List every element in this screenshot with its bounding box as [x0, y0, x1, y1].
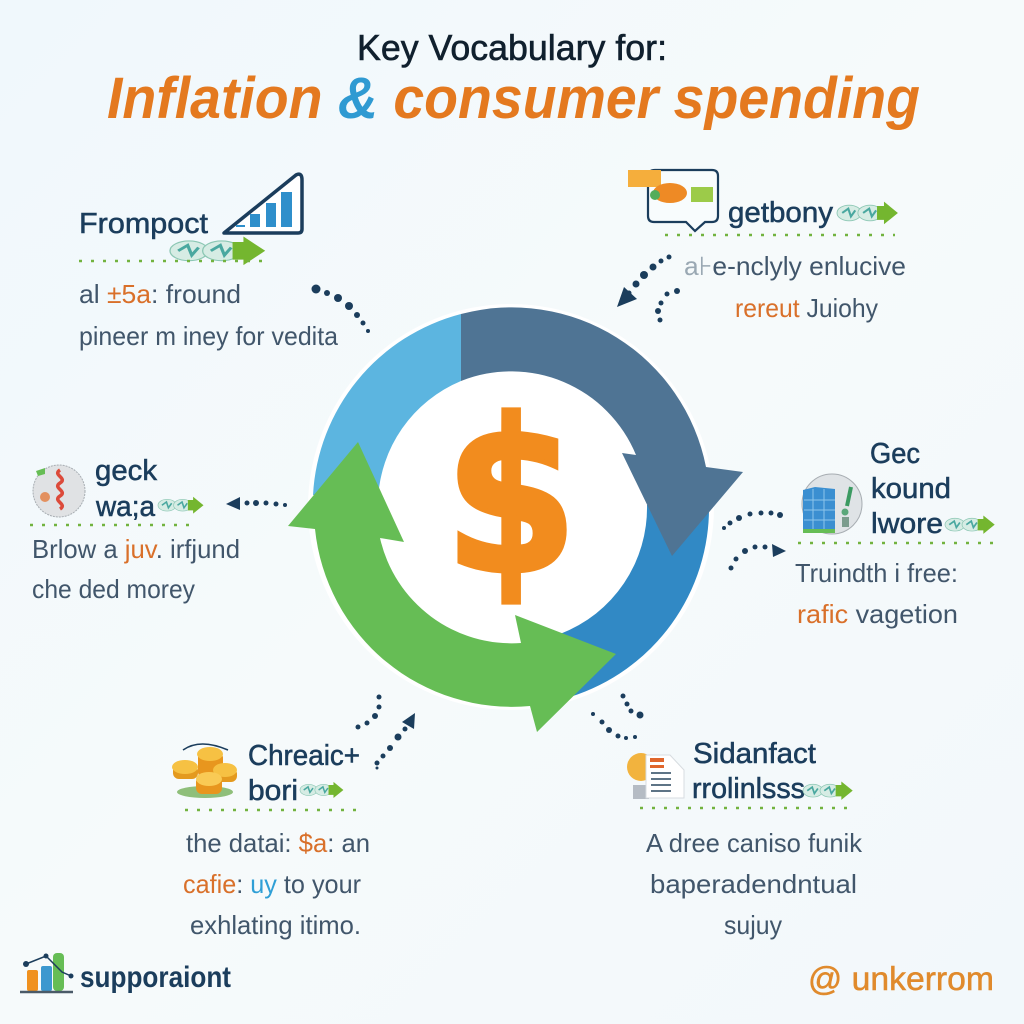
decoration: label pills [945, 515, 995, 534]
footer logo [20, 953, 231, 994]
panel: right term: lwore [871, 508, 943, 540]
panel: left term [30, 455, 240, 604]
decoration: label pills [158, 497, 204, 514]
icon: bar chart triangle [224, 174, 302, 233]
panel: bottom left term: exhlating itimo. [190, 910, 361, 940]
heading: geck [95, 455, 157, 487]
panel: right term [795, 438, 995, 629]
arrow: right dots [722, 510, 786, 570]
panel: bottom right term [627, 738, 863, 940]
definition: al ±5a: fround [79, 279, 241, 309]
panel: left term: che ded morey [32, 574, 195, 604]
icon: gold coins [172, 744, 237, 798]
ring arrow: slate blue [461, 307, 743, 556]
ring segment: light blue [313, 314, 461, 500]
panel: right term: kound [871, 473, 951, 505]
definition: Brlow a juv. irfjund [32, 534, 240, 564]
panel: bottom left term [172, 740, 370, 940]
definition: a⊦e-nclyly enlucive [684, 251, 906, 281]
definition: Truindth i free: [795, 558, 958, 588]
decoration: label pills [300, 782, 343, 798]
panel: bottom right term: baperadendntual [650, 869, 857, 899]
heading: Sidanfact [693, 738, 816, 770]
icon: dollar sign: $ [445, 374, 577, 621]
footer brand: @ unkerrom [808, 960, 994, 997]
panel: top right term: rereut Juiohy [735, 293, 878, 323]
panel: top left term: pineer m iney for vedita [79, 321, 339, 351]
arrow: bottom right dots [591, 694, 644, 740]
title [107, 27, 920, 131]
heading: Chreaic+ [248, 740, 360, 772]
title: Key Vocabulary for: [357, 27, 667, 68]
panel: bottom left term: bori [248, 775, 298, 807]
heading: Gec [870, 438, 920, 470]
icon: office building [802, 474, 862, 534]
decoration: label pills [837, 202, 898, 224]
panel: bottom left term: cafie: uy to your [183, 869, 361, 899]
panel: left term: wa;a [95, 491, 156, 523]
white halo [308, 304, 714, 710]
ring segment: bright blue [560, 505, 709, 697]
arrow: left dots [226, 497, 287, 510]
icon: bar chart logo [20, 953, 74, 992]
definition: the datai: $a: an [186, 828, 370, 858]
icon: speech bubble [628, 170, 718, 231]
arrow: top right dots [617, 254, 680, 322]
panel: right term: rafic vagetion [797, 599, 958, 629]
arrow: bottom left dots [356, 694, 415, 770]
decoration: label pills [170, 236, 265, 265]
icon: document [627, 753, 684, 799]
heading: getbony [728, 197, 834, 229]
heading: Frompoct [79, 208, 208, 240]
decoration: label pills [803, 781, 853, 800]
panel: bottom right term: rrolinlsss [692, 773, 805, 805]
definition: A dree caniso funik [646, 828, 863, 858]
panel: top left term [79, 174, 339, 351]
central cycle diagram [288, 304, 743, 732]
title: Inflation & consumer spending [107, 66, 920, 131]
ring arrow: green [288, 442, 616, 732]
panel: top right term [628, 170, 906, 323]
panel: bottom right term: sujuy [724, 910, 782, 940]
icon: red spiral coin [33, 465, 85, 517]
arrow: top left dots [312, 284, 370, 333]
footer logo: supporaiont [80, 961, 231, 994]
